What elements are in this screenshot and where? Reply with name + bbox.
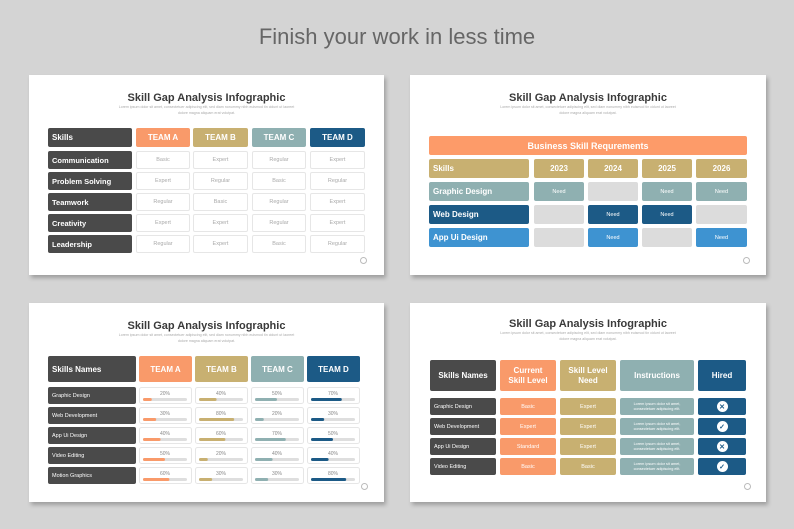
slide 1 rows: Basic	[156, 157, 170, 163]
slide 4 header row: Skills Names	[438, 371, 488, 380]
slide 1 rows	[48, 151, 365, 253]
slide 3 header row: TEAM C	[262, 364, 293, 374]
slide 1 rows: Regular	[153, 199, 173, 205]
hiring rows: ✓	[719, 464, 725, 470]
progress rows: 50%	[328, 431, 339, 437]
hiring rows: Lorem ipsum dolor sit amet,	[634, 462, 680, 466]
hiring rows: consectetuer adipiscing elit.	[634, 406, 680, 410]
hiring rows: Graphic Design	[434, 404, 472, 410]
hiring rows: Expert	[520, 424, 536, 430]
hiring rows: Basic	[521, 464, 535, 470]
hiring rows: Lorem ipsum dolor sit amet,	[634, 442, 680, 446]
slide 1 header row: TEAM B	[205, 133, 236, 142]
main heading: Finish your work in less time	[259, 24, 535, 49]
grid cells generated statically	[140, 388, 360, 484]
slide 1 rows: Regular	[269, 199, 289, 205]
hiring rows: Web Development	[434, 424, 479, 430]
slide 1 rows: Regular	[328, 241, 347, 247]
panel: slide 2 business skill requirements	[410, 75, 766, 275]
requirement rows: Need	[660, 188, 674, 194]
progress rows: 20%	[272, 411, 283, 417]
slide 1 rows: Creativity	[52, 218, 86, 228]
progress rows: 60%	[160, 471, 171, 477]
slide 4 header row: Skill Level	[508, 376, 548, 384]
slide 1 rows: Communication	[52, 156, 109, 164]
requirements banner: Business Skill Requrements	[527, 140, 649, 150]
slide 1 header row	[48, 128, 365, 147]
requirement rows	[429, 182, 747, 247]
requirement rows: App Ui Design	[433, 233, 488, 242]
requirement rows: Need	[660, 212, 674, 218]
slide 1 rows: Basic	[272, 178, 286, 184]
slide 3 header row: TEAM B	[206, 364, 237, 374]
slide 4 header row: Need	[578, 376, 598, 384]
slide 4 header row: Skill Level	[568, 366, 608, 374]
progress rows: 30%	[272, 471, 283, 477]
slide 1 rows: Expert	[330, 157, 345, 163]
hiring rows: App Ui Design	[434, 444, 469, 450]
progress rows: 20%	[216, 451, 227, 457]
hiring rows: Basic	[581, 464, 595, 470]
progress rows: 30%	[160, 411, 171, 417]
slide 1 header row: TEAM D	[322, 133, 353, 142]
slide 3 header row: TEAM D	[318, 364, 349, 374]
progress rows: 80%	[328, 471, 339, 477]
slide 1 subtitle: Lorem ipsum dolor sit amet, consectetuer adipiscing elit, sed diam nonummy nibh euismod tin cidunt ut laoreet dolore magna aliquam erat volutpat.	[119, 105, 294, 114]
slide 3 title: Skill Gap Analysis Infographic	[128, 320, 285, 332]
hiring rows: ✕	[719, 444, 725, 450]
requirement rows: Need	[606, 234, 620, 240]
progress rows: 50%	[160, 451, 171, 457]
hiring rows: ✓	[719, 424, 725, 430]
progress rows: 40%	[160, 431, 171, 437]
page icon	[743, 257, 750, 264]
slide 1 rows: Problem Solving	[52, 176, 111, 186]
slide 1 rows: Regular	[269, 157, 289, 163]
hiring rows: Video Editing	[434, 464, 466, 470]
slide 1 rows: Teamwork	[52, 198, 89, 206]
requirement rows: Need	[552, 188, 566, 194]
progress rows: App Ui Design	[52, 432, 87, 438]
slide 1 header row: TEAM A	[148, 133, 178, 142]
slide 4 title: Skill Gap Analysis Infographic	[509, 318, 667, 330]
slide 1 rows: Expert	[213, 241, 228, 247]
requirements banner	[429, 136, 747, 155]
slide 1 rows: Expert	[155, 220, 171, 226]
page icon	[744, 483, 751, 490]
requirement rows: Need	[715, 234, 728, 240]
page icon	[360, 257, 367, 264]
progress rows: 60%	[216, 431, 227, 437]
page icon	[361, 483, 368, 490]
progress rows: 20%	[160, 391, 171, 397]
year header row	[429, 159, 747, 178]
slide 2 subtitle: Lorem ipsum dolor sit amet, consectetuer adipiscing elit, sed diam nonummy nibh euismod tin cidunt ut laoreet dolore magna aliquam erat volutpat.	[500, 105, 676, 114]
slide 1 rows: Regular	[153, 241, 173, 247]
hiring rows: Expert	[580, 424, 596, 430]
progress rows: 50%	[272, 391, 283, 397]
slide 1 rows: Expert	[155, 178, 171, 184]
progress rows: Web Development	[52, 412, 97, 418]
hiring rows: consectetuer adipiscing elit.	[634, 446, 680, 450]
hiring rows: Expert	[580, 404, 596, 410]
slide 4 header row: Instructions	[634, 371, 680, 380]
hiring rows: Lorem ipsum dolor sit amet,	[634, 402, 680, 406]
slide 1 rows: Basic	[272, 241, 286, 247]
slide 1 header row: Skills	[52, 133, 73, 142]
slide 1 rows: Basic	[214, 199, 227, 205]
progress rows: 70%	[328, 391, 339, 397]
year header row: 2025	[658, 164, 676, 173]
slide 4 header row: Current	[514, 366, 542, 374]
requirement rows: Need	[715, 188, 728, 194]
progress rows: 30%	[216, 471, 227, 477]
panel: slide 3 team progress bars	[29, 303, 384, 502]
slide 4 header row	[430, 360, 746, 391]
requirement rows: Web Design	[433, 210, 479, 219]
year header row: 2023	[550, 164, 568, 173]
progress rows: 80%	[216, 411, 227, 417]
requirement rows: Need	[606, 212, 620, 218]
slide 1 header row: TEAM C	[264, 133, 294, 142]
hiring rows: consectetuer adipiscing elit.	[634, 466, 680, 470]
slide 1 rows: Regular	[328, 178, 347, 184]
hiring rows: ✕	[719, 404, 725, 410]
progress rows	[48, 387, 360, 484]
progress rows: 30%	[328, 411, 339, 417]
slide 1 rows: Expert	[213, 157, 228, 163]
slide 1 rows: Regular	[211, 178, 230, 184]
slide 1 rows: Regular	[269, 220, 289, 226]
year header row: 2024	[604, 164, 622, 173]
slide 1 rows: Expert	[330, 199, 345, 205]
progress rows: Graphic Design	[52, 392, 90, 398]
slide 4 subtitle: Lorem ipsum dolor sit amet, consectetuer adipiscing elit, sed diam nonummy nibh euismod tin cidunt ut laoreet dolore magna aliquam erat volutpat.	[500, 331, 676, 340]
hiring rows: Expert	[580, 444, 596, 450]
requirement rows: Graphic Design	[433, 187, 492, 196]
year header row: Skills	[433, 164, 454, 173]
slide 4 header row: Hired	[712, 371, 732, 380]
year header row: 2026	[713, 164, 730, 173]
slide 1 rows: Expert	[330, 220, 345, 226]
hiring rows: consectetuer adipiscing elit.	[634, 426, 680, 430]
progress rows: 40%	[272, 451, 283, 457]
slide 3 subtitle: Lorem ipsum dolor sit amet, consectetuer adipiscing elit, sed diam nonummy nibh euismod tin cidunt ut laoreet dolore magna aliquam erat volutpat.	[119, 333, 294, 342]
panel: slide 4 hiring table	[410, 303, 766, 502]
slide 1 rows: Expert	[213, 220, 228, 226]
panel: slide 1 team skills matrix	[29, 75, 384, 275]
progress rows: 70%	[272, 431, 283, 437]
progress rows: 40%	[216, 391, 227, 397]
slide 3 header row	[48, 356, 360, 382]
progress rows: 40%	[328, 451, 339, 457]
slide 3 header row: Skills Names	[52, 364, 101, 374]
progress rows: Video Editing	[52, 452, 84, 458]
progress rows: Motion Graphics	[52, 472, 92, 478]
hiring rows	[430, 398, 746, 475]
slide 2 title: Skill Gap Analysis Infographic	[509, 92, 667, 104]
slide 1 rows: Leadership	[52, 240, 92, 248]
hiring rows: Lorem ipsum dolor sit amet,	[634, 422, 680, 426]
hiring rows: Basic	[521, 404, 535, 410]
slide 3 header row: TEAM A	[150, 364, 181, 374]
hiring rows: Standard	[517, 444, 539, 450]
slide 1 title: Skill Gap Analysis Infographic	[128, 92, 285, 104]
